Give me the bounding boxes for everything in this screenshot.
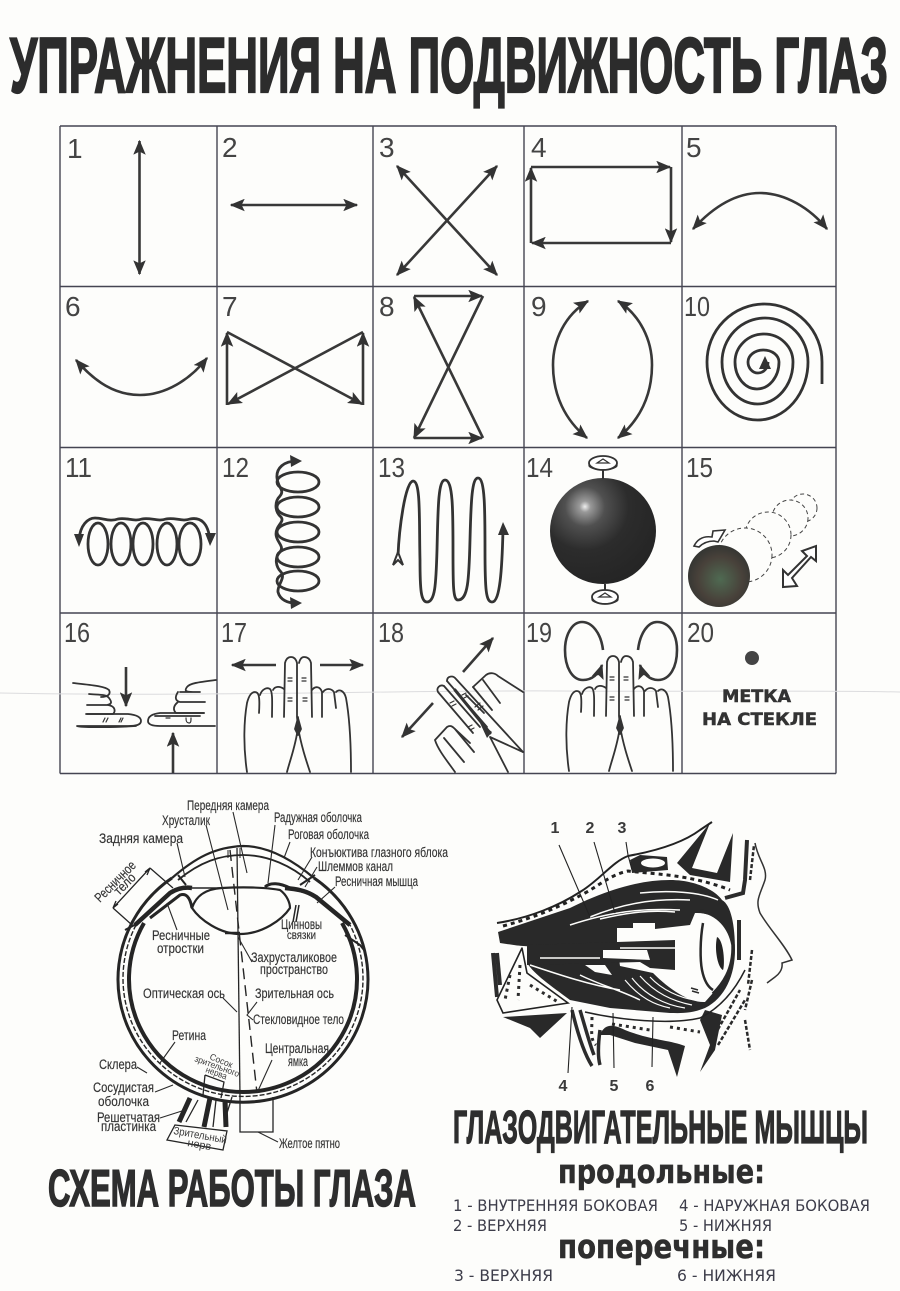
eye leader lines bbox=[137, 812, 335, 1142]
exercise 6: lower arc arrow bbox=[65, 291, 207, 395]
eye labels: Сосок bbox=[208, 1052, 234, 1070]
eye labels bbox=[92, 798, 448, 1153]
exercise 12: vertical coil: 12 bbox=[222, 452, 249, 483]
eye labels: Передняя камера bbox=[187, 798, 269, 813]
exercise 11: horizontal coil: 11 bbox=[65, 452, 92, 483]
exercise 2: horizontal arrow: 2 bbox=[222, 132, 238, 163]
eye labels: Ресничная мышца bbox=[335, 874, 418, 889]
eye labels: пластинка bbox=[101, 1119, 156, 1134]
transverse muscles heading: поперечные: bbox=[558, 1227, 765, 1266]
muscle numbers: 6 bbox=[646, 1078, 655, 1095]
eye labels: Задняя камера bbox=[99, 831, 183, 846]
eye labels: Зрительная ось bbox=[255, 986, 334, 1001]
eye labels: Склера bbox=[99, 1057, 137, 1072]
exercise 7: horizontal bow arrows bbox=[222, 291, 363, 405]
exercise 18: hands with diagonal arrows: 18 bbox=[378, 617, 404, 648]
exercise grid bbox=[0, 126, 900, 774]
exercise 16: hands with fingers up and down bbox=[64, 617, 216, 773]
exercise 1: vertical arrow: 1 bbox=[67, 133, 83, 164]
eye labels: Цинновы bbox=[281, 917, 322, 932]
eye labels: зрительного bbox=[193, 1053, 241, 1079]
muscle mass and eyeball bbox=[498, 880, 739, 1013]
eye labels: Ресничное bbox=[92, 858, 139, 905]
exercise 3: diagonal cross arrows bbox=[379, 132, 497, 275]
muscle numbers: 5 bbox=[610, 1078, 619, 1095]
exercise 6: lower arc arrow: 6 bbox=[65, 291, 81, 322]
exercise 9: paired side arcs: 9 bbox=[531, 291, 547, 322]
eye labels: ямка bbox=[288, 1054, 308, 1069]
orbit bones bbox=[493, 822, 747, 1077]
muscle numbers bbox=[551, 820, 655, 1095]
eyeball cross-section bbox=[113, 846, 368, 1150]
transverse muscles list: 6 - НИЖНЯЯ bbox=[677, 1266, 776, 1285]
exercise 13: vertical zigzag wave: 13 bbox=[378, 452, 405, 483]
eye labels: Центральная bbox=[265, 1041, 329, 1056]
eye anatomy diagram bbox=[92, 798, 448, 1153]
longitudinal muscles list: 2 - ВЕРХНЯЯ bbox=[453, 1216, 547, 1235]
exercise 3: diagonal cross arrows: 3 bbox=[379, 132, 395, 163]
exercise 2: horizontal arrow bbox=[222, 132, 357, 205]
eye labels: Хрусталик bbox=[162, 813, 210, 828]
eye labels: Ретина bbox=[172, 1028, 206, 1043]
exercise 14: sphere on axis discs: 14 bbox=[526, 452, 553, 483]
exercise 9: paired side arcs bbox=[531, 291, 652, 438]
eye labels: Решетчатая bbox=[97, 1110, 160, 1125]
exercise 14: sphere on axis discs bbox=[526, 452, 656, 604]
longitudinal muscles list bbox=[453, 1196, 870, 1235]
eye labels: Оптическая ось bbox=[143, 986, 225, 1001]
exercise 12: vertical coil bbox=[222, 452, 319, 609]
exercise 8: vertical hourglass arrows bbox=[379, 291, 483, 438]
exercise 13: vertical zigzag wave bbox=[378, 452, 509, 602]
exercise 17: hands with horizontal arrows: 17 bbox=[221, 617, 247, 648]
eye scheme heading: СХЕМА РАБОТЫ ГЛАЗА bbox=[48, 1160, 416, 1218]
eye labels: пространство bbox=[260, 962, 328, 977]
eye labels: нерв bbox=[186, 1137, 212, 1153]
eye labels: Стекловидное тело bbox=[253, 1012, 344, 1027]
eye labels: оболочка bbox=[98, 1094, 149, 1109]
eye labels: тело bbox=[111, 870, 139, 898]
face profile bbox=[755, 843, 792, 983]
transverse muscles list: 3 - ВЕРХНЯЯ bbox=[454, 1266, 553, 1285]
eye labels: Сосудистая bbox=[93, 1080, 154, 1095]
oculomotor muscles drawing bbox=[493, 820, 792, 1095]
exercise 19: hands with circular arrows bbox=[526, 617, 677, 771]
eye labels: Радужная оболочка bbox=[274, 810, 362, 825]
longitudinal muscles list: 1 - ВНУТРЕННЯЯ БОКОВАЯ bbox=[453, 1196, 658, 1215]
exercise 20: glass mark: МЕТКА bbox=[722, 687, 792, 707]
eye labels: связки bbox=[287, 930, 316, 942]
exercise 8: vertical hourglass arrows: 8 bbox=[379, 291, 395, 322]
exercise 10: spiral bbox=[684, 291, 822, 420]
longitudinal muscles list: 4 - НАРУЖНАЯ БОКОВАЯ bbox=[679, 1196, 870, 1215]
cheek hatching bbox=[712, 845, 754, 1050]
eye labels: нерва bbox=[204, 1064, 228, 1081]
exercise 11: horizontal coil bbox=[65, 452, 216, 565]
eye labels: Роговая оболочка bbox=[288, 827, 369, 842]
exercise 5: upper arc arrow bbox=[686, 132, 827, 229]
exercise 4: rectangle arrows bbox=[531, 132, 671, 243]
eye labels: Зрительный bbox=[172, 1125, 228, 1146]
muscle numbers: 4 bbox=[559, 1078, 568, 1095]
eye labels: отростки bbox=[157, 941, 204, 956]
exercise 20: glass mark bbox=[687, 617, 817, 730]
eye labels: Захрусталиковое bbox=[251, 950, 337, 965]
eye labels: Шлеммов канал bbox=[318, 859, 393, 874]
transverse muscles list bbox=[454, 1266, 776, 1285]
exercise 5: upper arc arrow: 5 bbox=[686, 132, 702, 163]
eye labels: Конъюктива глазного яблока bbox=[310, 845, 448, 860]
exercise 15: sphere moving toward and away bbox=[686, 452, 817, 607]
exercise 20: glass mark: 20 bbox=[687, 617, 714, 648]
muscle numbers: 2 bbox=[586, 820, 595, 837]
muscle numbers: 3 bbox=[618, 820, 627, 837]
exercise 15: sphere moving toward and away: 15 bbox=[686, 452, 713, 483]
exercise 17: hands with horizontal arrows bbox=[221, 617, 363, 772]
exercise 10: spiral: 10 bbox=[684, 291, 710, 322]
longitudinal muscles heading: продольные: bbox=[558, 1152, 765, 1191]
muscle numbers: 1 bbox=[551, 820, 560, 837]
muscle leader lines bbox=[559, 842, 653, 1073]
exercise 19: hands with circular arrows: 19 bbox=[526, 617, 552, 648]
longitudinal muscles list: 5 - НИЖНЯЯ bbox=[679, 1216, 772, 1235]
exercise 18: hands with diagonal arrows bbox=[378, 617, 523, 772]
exercise 4: rectangle arrows: 4 bbox=[531, 132, 547, 163]
exercise 7: horizontal bow arrows: 7 bbox=[222, 291, 238, 322]
eye labels: Желтое пятно bbox=[279, 1136, 340, 1151]
eye labels: Ресничные bbox=[152, 928, 210, 943]
exercise 20: glass mark: НА СТЕКЛЕ bbox=[702, 710, 817, 730]
exercise 16: hands with fingers up and down: 16 bbox=[64, 617, 90, 648]
